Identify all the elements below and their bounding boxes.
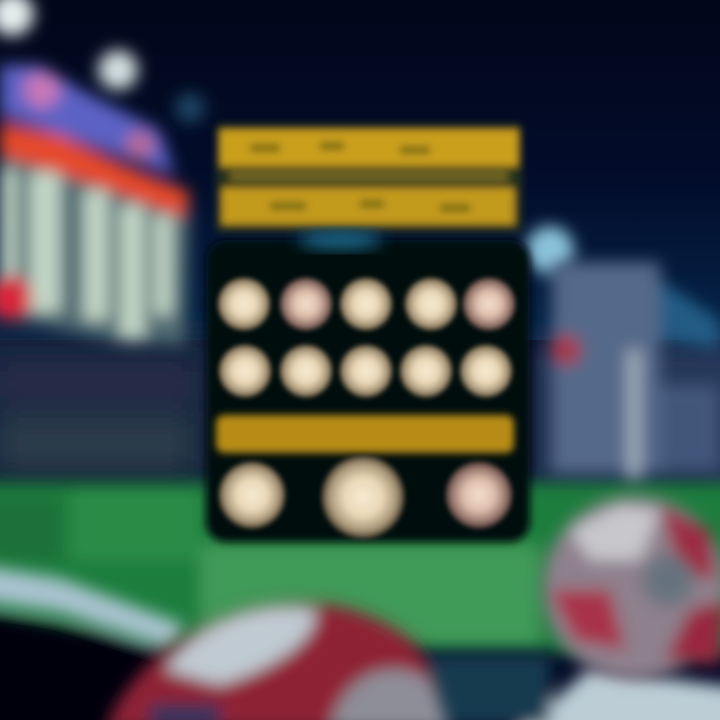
pitch <box>0 482 720 652</box>
gold divider banner <box>216 415 514 453</box>
panel: score board <box>206 124 530 542</box>
stand: right goal structure <box>551 262 720 480</box>
icons: bottom row of medals <box>218 455 513 539</box>
icons: second row of medals <box>218 344 513 398</box>
icons: first row of medals <box>217 277 516 331</box>
foreground: white pitch line <box>0 565 720 720</box>
heading: title banner <box>216 124 522 232</box>
grandstand: left building <box>0 65 190 345</box>
floodlights <box>0 0 574 274</box>
icon: football boot foreground <box>105 603 450 720</box>
glow under heading <box>298 231 382 249</box>
icon: football right <box>543 496 720 680</box>
stands: crowd band <box>0 330 720 490</box>
